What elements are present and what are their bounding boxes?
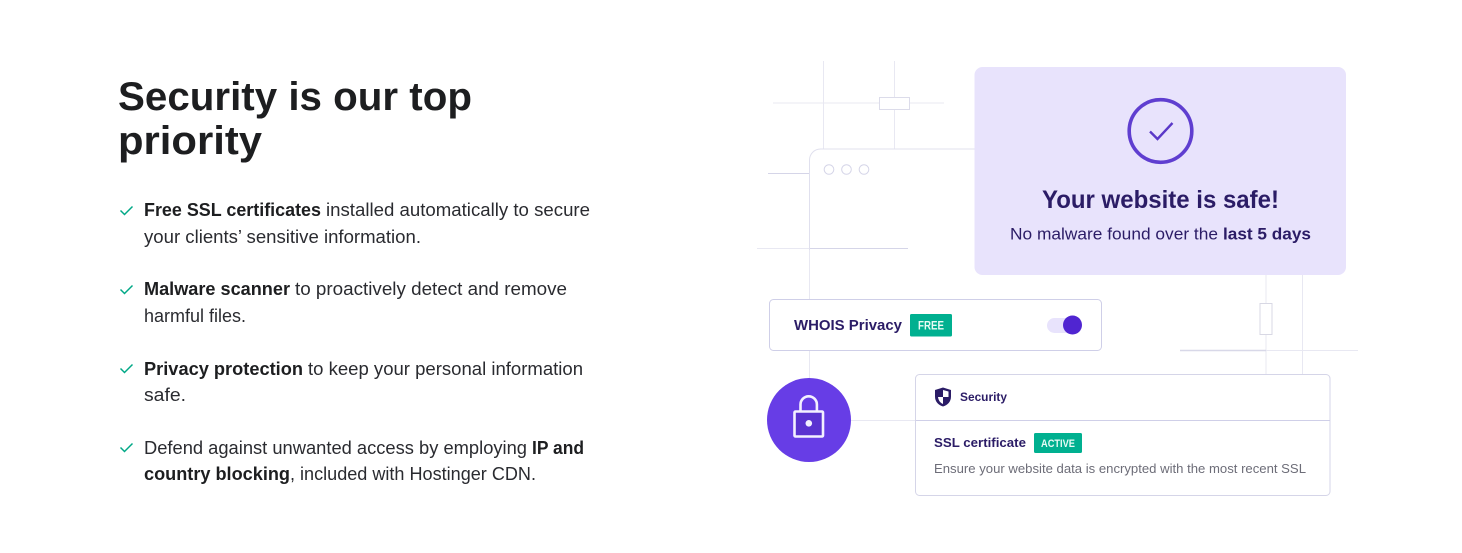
list item: free SSL: installed automatically to secure bbox=[326, 200, 590, 220]
panel: website safe: Your website is safe! bbox=[1042, 186, 1279, 214]
panel: security card: SSL certificate bbox=[934, 435, 1026, 450]
list item: privacy protection: safe. bbox=[144, 385, 186, 405]
badge: free bbox=[910, 314, 952, 336]
toggle bbox=[1047, 316, 1082, 334]
badge: free: FREE bbox=[918, 318, 944, 332]
list item: malware scanner bbox=[120, 279, 567, 326]
icon: shield bbox=[935, 388, 951, 406]
list item: malware scanner: to proactively detect and remove bbox=[295, 279, 567, 299]
list item: privacy protection: to keep your personal information bbox=[308, 359, 583, 379]
icon: padlock bbox=[767, 378, 851, 462]
list item: IP and country blocking: , included with Hostinger CDN. bbox=[290, 464, 536, 484]
panel: security card: Ensure your website data is encrypted with the most recent SSL bbox=[934, 462, 1306, 476]
badge: active bbox=[1034, 433, 1082, 453]
panel: website safe: last 5 days bbox=[1223, 226, 1311, 244]
icon: check circle bbox=[1129, 100, 1192, 162]
title: Security is our top bbox=[118, 75, 472, 119]
title: priority bbox=[118, 119, 263, 163]
list item: malware scanner: harmful files. bbox=[144, 306, 246, 326]
panel: WHOIS privacy bbox=[770, 300, 1102, 350]
panel: WHOIS privacy: WHOIS Privacy bbox=[794, 317, 903, 334]
list item: IP and country blocking: country blocking bbox=[144, 464, 290, 484]
list item: free SSL bbox=[120, 200, 590, 247]
panel: security card: Security bbox=[960, 392, 1008, 404]
list item: free SSL: your clients’ sensitive information. bbox=[144, 227, 421, 247]
list item: privacy protection bbox=[120, 359, 583, 405]
list item: free SSL: Free SSL certificates bbox=[144, 200, 321, 220]
title bbox=[118, 75, 472, 163]
feature list bbox=[120, 200, 590, 484]
panel: website safe bbox=[974, 67, 1346, 275]
list item: IP and country blocking: IP and bbox=[532, 438, 584, 458]
panel: security card bbox=[916, 374, 1330, 496]
list item: privacy protection: Privacy protection bbox=[144, 359, 303, 379]
list item: IP and country blocking bbox=[120, 438, 584, 484]
panel: website safe: No malware found over the bbox=[1010, 226, 1218, 244]
browser window outline bbox=[810, 149, 980, 250]
badge: active: ACTIVE bbox=[1041, 438, 1075, 450]
list item: malware scanner: Malware scanner bbox=[144, 279, 290, 299]
list item: IP and country blocking: Defend against unwanted access by employing bbox=[144, 438, 527, 458]
background grid lines bbox=[757, 61, 1358, 420]
